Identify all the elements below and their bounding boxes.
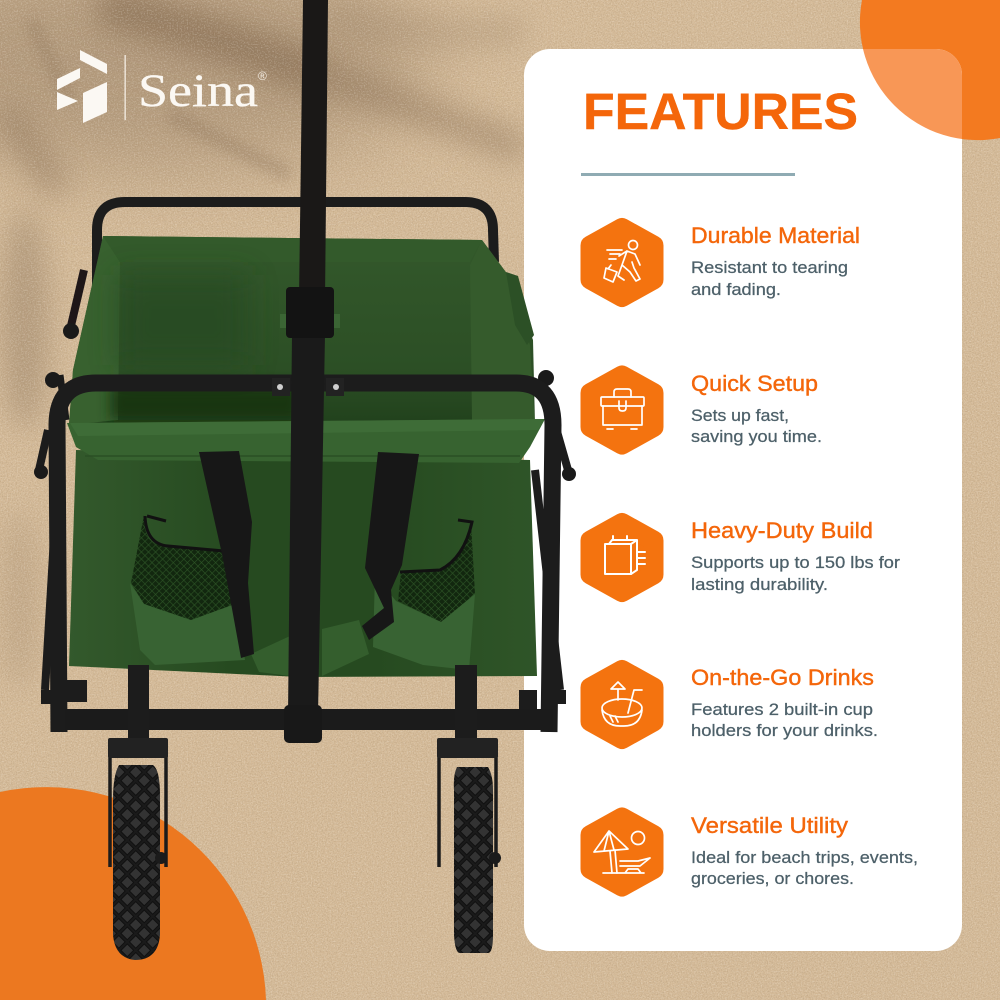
- logo mark: [57, 50, 107, 123]
- description: saving you time.: [691, 427, 822, 446]
- pole bottom joint: [284, 705, 322, 743]
- description: and fading.: [691, 280, 781, 299]
- left pocket front: [130, 583, 245, 665]
- feature: durable material: [590, 223, 860, 299]
- description: Features 2 built-in cup: [691, 700, 873, 719]
- card background: [524, 49, 962, 951]
- left pocket mesh: [131, 515, 236, 621]
- collar clips: [280, 314, 286, 328]
- basket interior: [69, 236, 535, 425]
- right black strap: [362, 452, 419, 640]
- left side knob: [45, 372, 61, 388]
- right lower corner pieces: [519, 690, 566, 710]
- basket top hem: [103, 236, 482, 262]
- left wheel: [108, 738, 168, 960]
- logo: [57, 50, 267, 123]
- left outer struts: [39, 430, 58, 690]
- feature: on-the-go drinks: [590, 665, 878, 740]
- left bottom mount: [128, 665, 149, 743]
- lower pole: [288, 335, 325, 715]
- center fabric straps: [251, 636, 290, 676]
- fork: [439, 750, 496, 867]
- heading: Heavy-Duty Build: [691, 518, 873, 543]
- front frame brackets: [272, 378, 344, 396]
- decorative orange circle bottom left: [0, 787, 266, 1000]
- back frame: [97, 202, 494, 345]
- description: Supports up to 150 lbs for: [691, 553, 900, 572]
- description: lasting durability.: [691, 575, 828, 594]
- decorative orange circle top right: [860, 0, 1000, 140]
- tyre: [454, 767, 493, 953]
- left pocket edge: [145, 516, 224, 551]
- title rule: [581, 173, 795, 176]
- tyre: [113, 765, 160, 960]
- front rim: [67, 419, 545, 463]
- logo divider: [124, 55, 126, 120]
- description: Sets up fast,: [691, 406, 789, 425]
- description: [691, 258, 848, 299]
- left side folding strut: [70, 270, 84, 330]
- title: FEATURES: [583, 83, 858, 140]
- description: [691, 700, 878, 740]
- logo wordmark: Seina: [138, 65, 258, 117]
- shaded corner: [110, 385, 300, 420]
- description: [691, 553, 900, 594]
- description: groceries, or chores.: [691, 869, 854, 888]
- icon: reinforced chip: [590, 523, 654, 592]
- left black strap: [199, 451, 254, 658]
- feature: quick setup: [590, 371, 822, 446]
- basket left wall: [69, 236, 120, 425]
- icon: beach umbrella and lounger: [590, 818, 654, 886]
- icon: coconut drink: [590, 670, 654, 739]
- icon: toolbox: [590, 376, 654, 444]
- description: [691, 406, 822, 446]
- heading: Versatile Utility: [691, 813, 848, 838]
- left lower corner pieces: [41, 680, 87, 704]
- feature: heavy-duty build: [590, 518, 900, 594]
- right corner strap: [506, 272, 534, 345]
- fork: [110, 750, 166, 867]
- rim stitching: [85, 455, 520, 457]
- heading: Durable Material: [691, 223, 860, 248]
- right pocket edge: [400, 520, 472, 572]
- right pocket mesh: [398, 522, 475, 622]
- features content: [581, 83, 918, 888]
- front frame: [57, 383, 553, 732]
- registered mark: ®: [258, 69, 267, 83]
- description: [691, 848, 918, 888]
- icon: running person with bag: [590, 228, 654, 297]
- right wheel: [437, 738, 501, 953]
- wagon product photo: [34, 0, 576, 960]
- bottom crossbar: [65, 709, 553, 730]
- right bottom mount: [455, 665, 477, 743]
- card corner circle: [863, 49, 962, 139]
- heading: On-the-Go Drinks: [691, 665, 874, 690]
- right outer struts: [535, 400, 568, 690]
- basket right wall: [470, 240, 535, 425]
- description: holders for your drinks.: [691, 721, 878, 740]
- description: Resistant to tearing: [691, 258, 848, 277]
- front basket panel: [69, 450, 537, 677]
- description: Ideal for beach trips, events,: [691, 848, 918, 867]
- upper pole: [299, 0, 328, 300]
- pole collar: [286, 287, 334, 338]
- heading: Quick Setup: [691, 371, 818, 396]
- feature: versatile utility: [590, 813, 918, 888]
- right pocket front: [373, 575, 475, 670]
